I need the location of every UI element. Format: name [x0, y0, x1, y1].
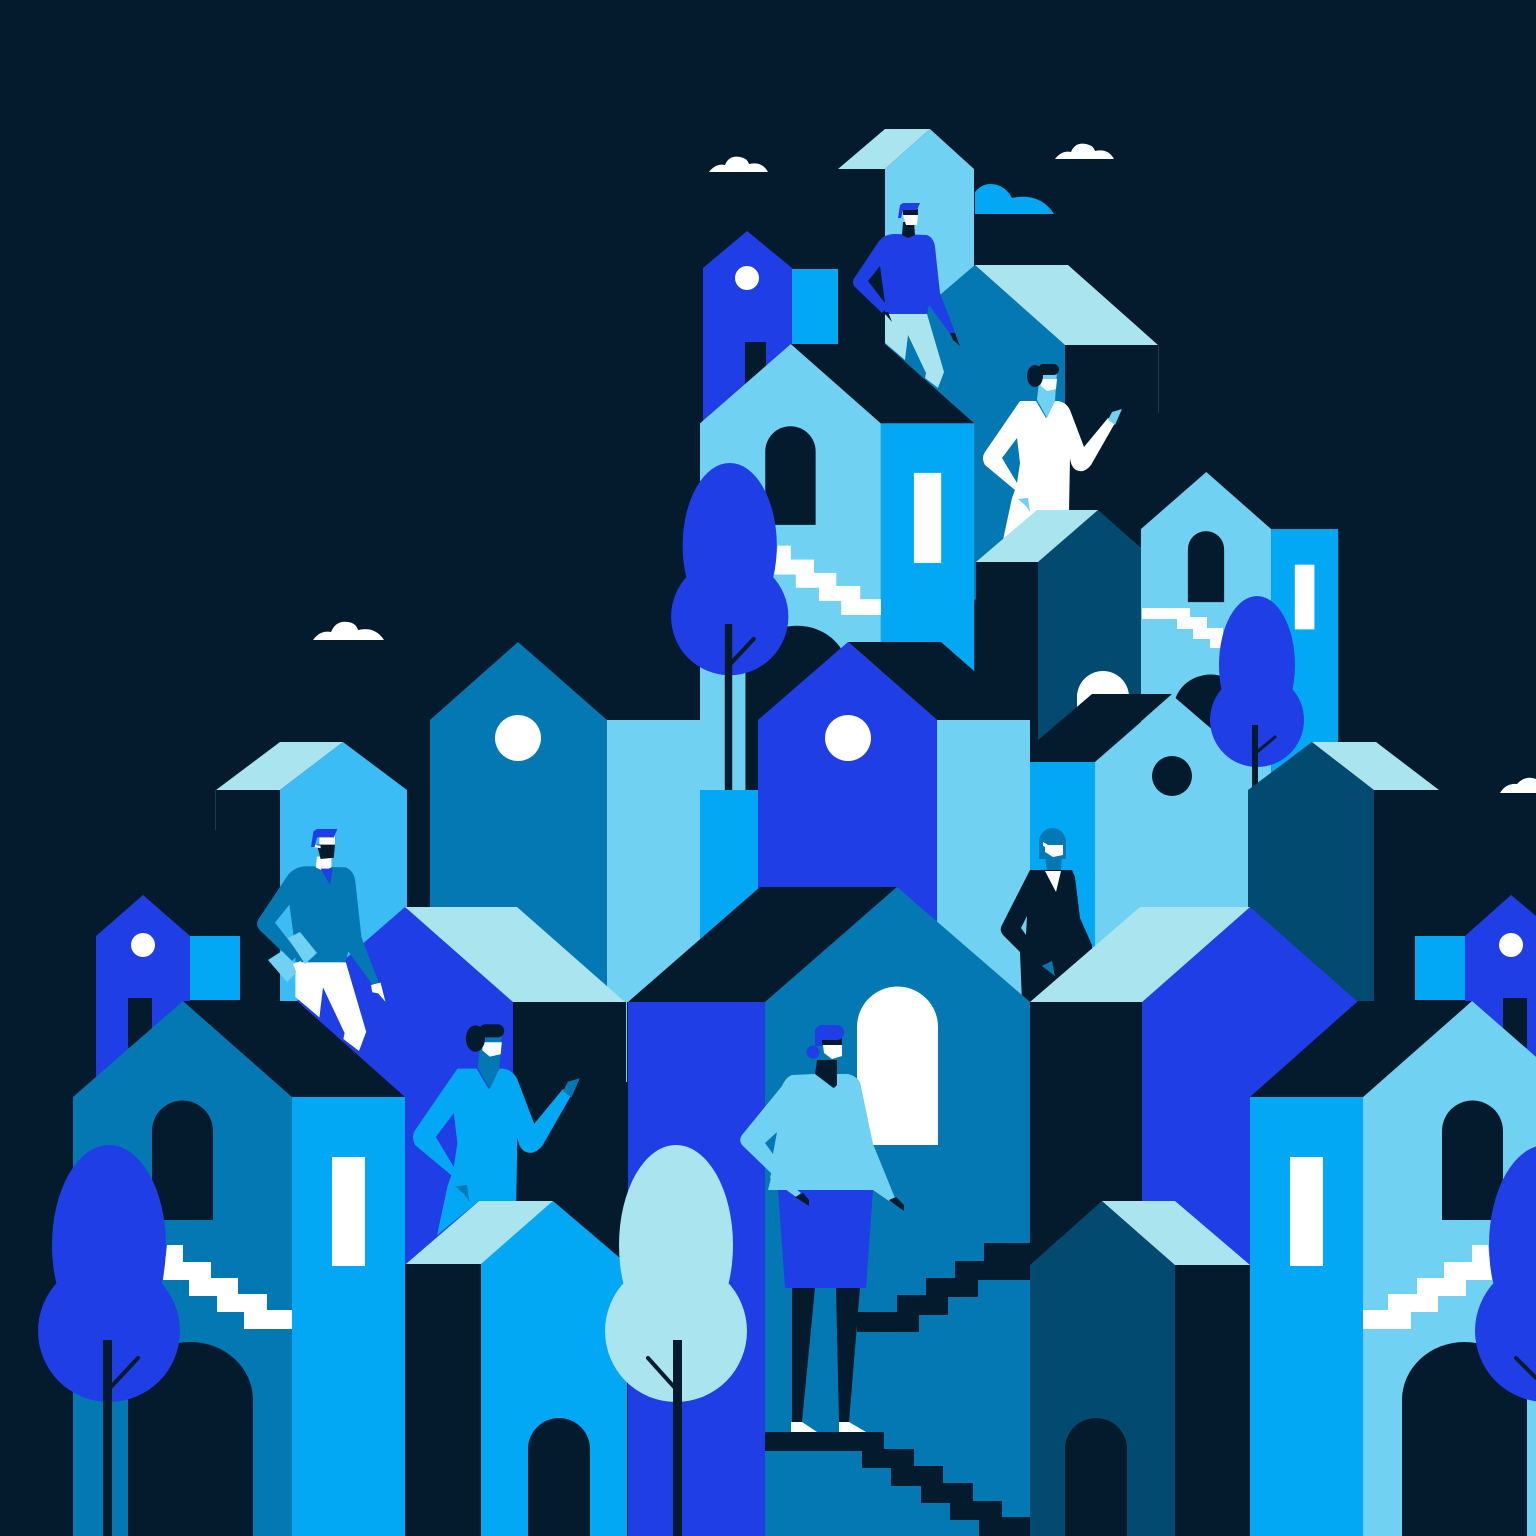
house: right teal with pale roof: [1248, 742, 1439, 1002]
house: right royal with pale roof: [1030, 907, 1358, 1302]
house: back right with stairs: [1141, 472, 1338, 790]
person: woman in white coat: [983, 364, 1122, 540]
house: left small royal: [96, 895, 240, 1100]
tree: top royal: [671, 463, 788, 790]
house: bottom dark teal with pale roof: [1030, 1201, 1250, 1536]
tree: bottom right royal: [1475, 1145, 1536, 1402]
person: woman in black suit: [1001, 828, 1092, 1005]
house: top mid blue with pale roof: [885, 265, 1158, 600]
house: bottom right with arch and stairs: [1250, 1001, 1536, 1536]
tree: right royal: [1210, 596, 1304, 790]
house: top small royal house: [703, 231, 838, 430]
house: dark teal with pale roof: [976, 510, 1141, 780]
cloud: right edge white: [1500, 778, 1536, 793]
house: center light with round window: [1030, 694, 1250, 1002]
house: bottom left with arch and stairs: [73, 1001, 405, 1536]
cloud: left white: [313, 622, 384, 640]
person: woman in bright blue coat: [413, 1024, 580, 1235]
cloud: blue: [975, 184, 1054, 214]
stairs: lower dark: [765, 1432, 1030, 1536]
person: woman in light sweater and royal skirt: [740, 1025, 904, 1432]
person: man in royal sweater: [853, 203, 960, 388]
tree: bottom left royal: [38, 1145, 180, 1536]
tree: bottom pale: [605, 1145, 747, 1536]
cloud: top left white: [709, 157, 768, 172]
house: top tower: [838, 129, 974, 342]
house: top main with arch and stairs: [700, 344, 974, 790]
house: left royal with pale roof: [297, 907, 626, 1300]
house: right small royal: [1415, 895, 1536, 1080]
cloud: top right white: [1055, 144, 1114, 159]
house: left with pale roof: [216, 742, 407, 1002]
house: mid row royal with window: [758, 642, 1030, 1005]
house: bottom bright with pale roof: [405, 1201, 627, 1536]
stairs: upper dark: [857, 1243, 1030, 1332]
house: center with royal front and white arch: [628, 887, 1030, 1536]
person: man in blue sweater with papers: [257, 829, 385, 1051]
house: mid row teal with window: [430, 642, 700, 1002]
block: bright base beneath top house: [700, 790, 758, 950]
